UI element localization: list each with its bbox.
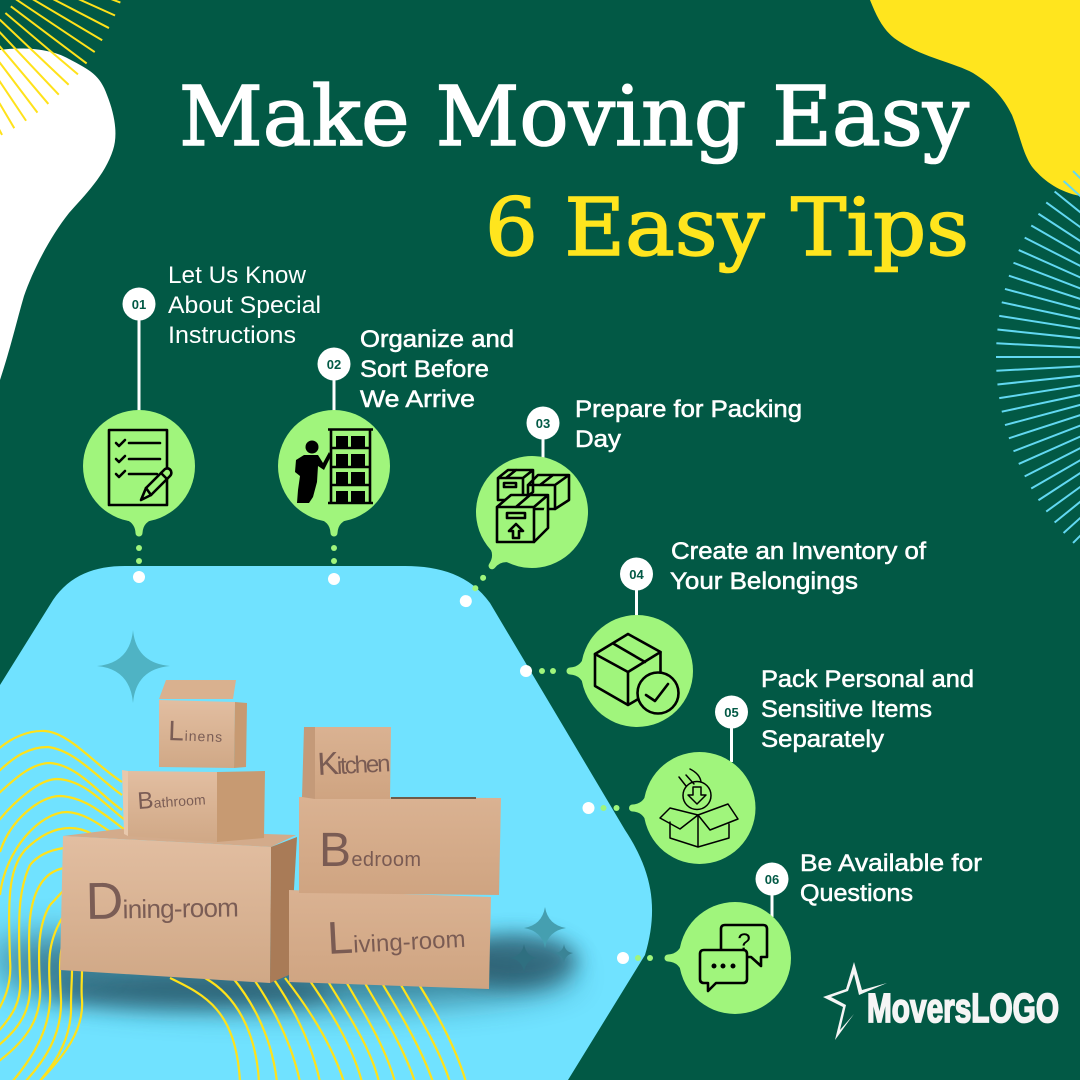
icon: chat bubbles: ? [737,929,751,956]
step 1 text [168,262,321,349]
step 2 connector and number: 02 [327,357,341,372]
title: 6 Easy Tips [485,181,969,274]
step 4 [520,538,926,727]
yellow contour lines [0,731,466,1080]
sparkles near shadow [510,907,573,972]
cardboard boxes [60,680,501,989]
step 2 connector and number [318,348,350,412]
box: bathroom: Bathroom [137,783,206,815]
blue sunburst right [996,171,1080,543]
step 3 connector and number: 03 [536,416,550,431]
icon: chat bubbles [700,925,767,991]
step 2 [278,326,514,585]
step 3 bubble [417,434,610,639]
step 2 text [360,326,514,413]
box: bedroom [299,797,501,895]
step 4 connector and number: 04 [629,567,644,582]
box: linens: Linens [168,715,223,748]
box: linens [159,680,247,768]
step 2 text: Organize and [360,326,514,353]
step 6 text: Questions [800,880,913,907]
box shadow [0,931,577,1009]
icon: box with check [595,634,678,714]
step 6 text [800,850,982,907]
title [179,70,970,274]
box: dining-room: Dining-room [85,870,239,931]
step 3 text: Day [575,426,621,453]
box: kitchen: Kitchen [316,742,391,782]
step 3 connector and number [526,406,560,460]
step 3 text [575,396,802,453]
white blob top left [0,49,115,380]
step 1 text: Let Us Know [168,262,307,289]
step 5 text: Sensitive Items [761,696,932,723]
step 5 [582,666,974,864]
box: dining-room [60,829,297,983]
step 1 text: Instructions [168,322,296,349]
box: kitchen [302,727,391,799]
step 5 text [761,666,974,753]
step 5 text: Separately [761,726,884,753]
step 6 [617,850,982,1014]
step 6 text: Be Available for [800,850,982,877]
blue hexagon panel [0,566,652,1080]
step 6 bubble [617,902,791,1014]
icon: open box with arrow [660,769,738,847]
step 5 bubble [582,752,756,864]
step 2 text: We Arrive [360,386,475,413]
step 3 text: Prepare for Packing [575,396,802,423]
icon: checklist [109,430,171,505]
step 4 text: Create an Inventory of [671,538,926,565]
step 1 connector and number [122,288,156,412]
step 4 text: Your Belongings [670,568,858,595]
step 1 bubble [83,410,195,583]
step 4 connector and number [620,558,653,618]
title: Make Moving Easy [179,70,970,165]
step 3 [417,396,802,639]
step 6 connector and number [756,862,788,917]
logo [823,962,1059,1040]
step 2 text: Sort Before [360,356,489,383]
yellow blob top right [870,0,1080,196]
icon: worker with shelves [295,429,373,504]
step 2 bubble [278,410,390,585]
icon: stacked boxes [497,470,569,542]
step 5 connector and number: 05 [724,705,739,720]
step 4 bubble [520,615,693,727]
box: bathroom [122,770,265,842]
box: bedroom: Bedroom [319,824,421,877]
sparkle large [97,630,170,703]
step 5 text: Pack Personal and [761,666,974,693]
step 6 connector and number: 06 [765,872,779,887]
box: living-room: Living-room [326,905,466,964]
box: living-room [289,890,491,989]
step 5 connector and number [715,696,748,762]
logo star [823,962,887,1040]
yellow sunburst top left [0,0,125,135]
step 1 text: About Special [168,292,321,319]
step 1 [83,262,321,583]
step 1 connector and number: 01 [132,297,146,312]
step 4 text [670,538,926,595]
